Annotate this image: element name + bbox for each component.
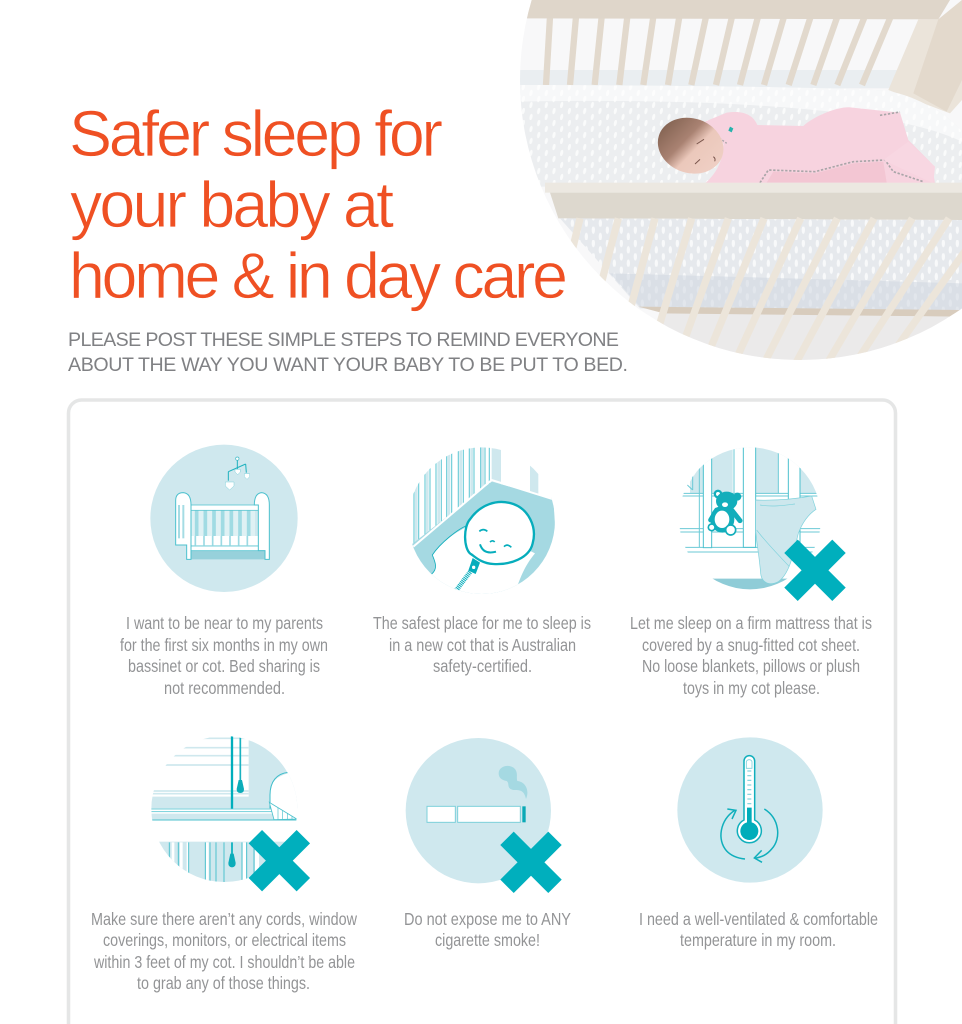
title (69, 98, 568, 312)
icon: thermometer with ventilation arrows (677, 737, 823, 883)
icon: no cigarette smoke (406, 738, 555, 886)
panel: steps container (68, 400, 896, 1024)
step text: near parents (120, 613, 328, 698)
step text: temperature (639, 909, 878, 950)
step text: near parents: for the first six months in my own (120, 635, 328, 655)
step text: cords: to grab any of those things. (137, 973, 310, 993)
step text: temperature: I need a well-ventilated & comfortable (639, 909, 878, 929)
step text: firm mattress: toys in my cot please. (683, 678, 820, 698)
step text: safest place: The safest place for me to sleep is (373, 613, 591, 633)
step text: firm mattress: Let me sleep on a firm mattress that is (630, 613, 872, 633)
step text: smoke: Do not expose me to ANY (404, 909, 571, 929)
title: Safer sleep for (69, 98, 443, 170)
icon: firm mattress, no plush toys or blankets (677, 443, 839, 594)
step text: smoke (404, 909, 571, 950)
step text: safest place (373, 613, 591, 676)
step text: cords: within 3 feet of my cot. I shouldn’t be able (93, 952, 355, 972)
step text: near parents: I want to be near to my parents (126, 613, 323, 633)
swaddled baby (432, 502, 535, 603)
step text: cords: coverings, monitors, or electrical items (103, 930, 346, 950)
step text: cords (91, 909, 357, 993)
loose blanket (756, 496, 816, 584)
step text: near parents: bassinet or cot. Bed sharing is (128, 656, 320, 676)
subtitle: ABOUT THE WAY YOU WANT YOUR BABY TO BE PUT TO BED. (68, 354, 628, 376)
step text: near parents: not recommended. (164, 678, 285, 698)
photo: baby sleeping in cot (520, 0, 962, 370)
cross mark (507, 838, 555, 886)
subtitle: PLEASE POST THESE SIMPLE STEPS TO REMIND EVERYONE (68, 329, 619, 351)
icon: cot with mobile (150, 445, 298, 592)
cross mark (255, 837, 303, 885)
teddy bear (708, 490, 741, 535)
step text: cords: Make sure there aren’t any cords, window (91, 909, 357, 929)
subtitle (68, 329, 628, 376)
cross mark (791, 546, 839, 594)
step text: temperature: temperature in my room. (680, 930, 836, 950)
icon: cords and window coverings away from cot (150, 735, 303, 886)
step text: firm mattress (630, 613, 872, 698)
baby swaddle (651, 107, 935, 183)
step text: firm mattress: No loose blankets, pillows or plush (642, 656, 860, 676)
title: home & in day care (69, 240, 568, 312)
title: your baby at (70, 169, 394, 241)
step text: safest place: safety-certified. (433, 656, 532, 676)
icon: baby in safety-certified cot (412, 447, 555, 594)
step text: firm mattress: covered by a snug-fitted cot sheet. (642, 635, 860, 655)
step text: smoke: cigarette smoke! (435, 930, 540, 950)
step text: safest place: in a new cot that is Australian (389, 635, 576, 655)
